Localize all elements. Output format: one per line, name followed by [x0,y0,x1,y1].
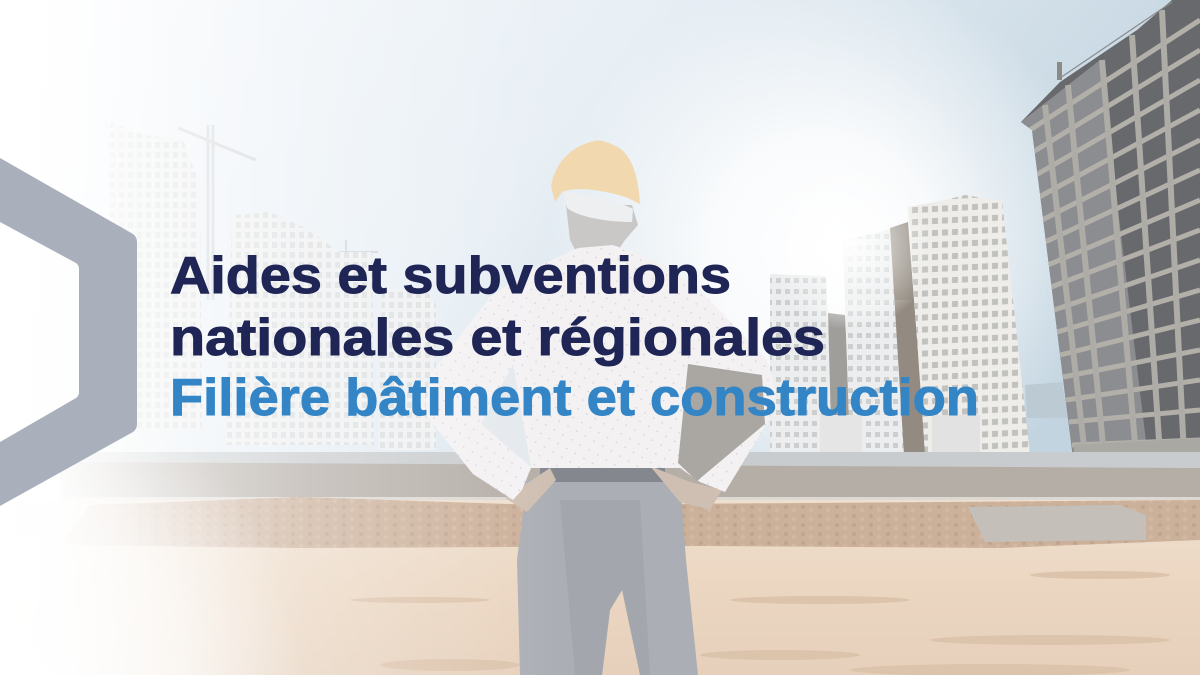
hexagon outline decoration [0,158,137,506]
title [170,247,979,427]
left white fade [0,0,560,675]
sun glow [450,0,1150,470]
legs [517,480,698,675]
distant crane left [178,125,378,300]
gap between left arm and torso [481,364,531,467]
floor slabs [1030,20,1200,445]
soil piles [60,497,1200,548]
hard hat [551,141,640,204]
central towers [700,160,1068,470]
shirt [425,245,776,500]
title line 2: nationales et régionales [170,309,825,367]
road strip [60,497,1200,503]
hat band [564,192,633,222]
subtitle line: Filière bâtiment et construction [170,369,979,427]
main building right [1020,0,1200,460]
low structures [80,452,1200,470]
sky [0,0,1200,470]
left faded towers [105,120,436,450]
lower-left white fade [0,375,300,675]
hands [505,468,556,512]
columns [1045,10,1184,455]
title line 1: Aides et subventions [170,247,731,305]
rooftop crane [1057,2,1172,80]
ground [0,500,1200,675]
ground ruts [350,571,1170,675]
head and neck [566,205,638,255]
boundary wall [60,462,1200,498]
worker seen from behind [425,141,776,675]
concrete slab [968,505,1146,542]
gap between right arm and torso [678,364,765,481]
left face lighter [1021,60,1147,458]
leg shading [560,500,650,675]
belt [540,465,665,482]
